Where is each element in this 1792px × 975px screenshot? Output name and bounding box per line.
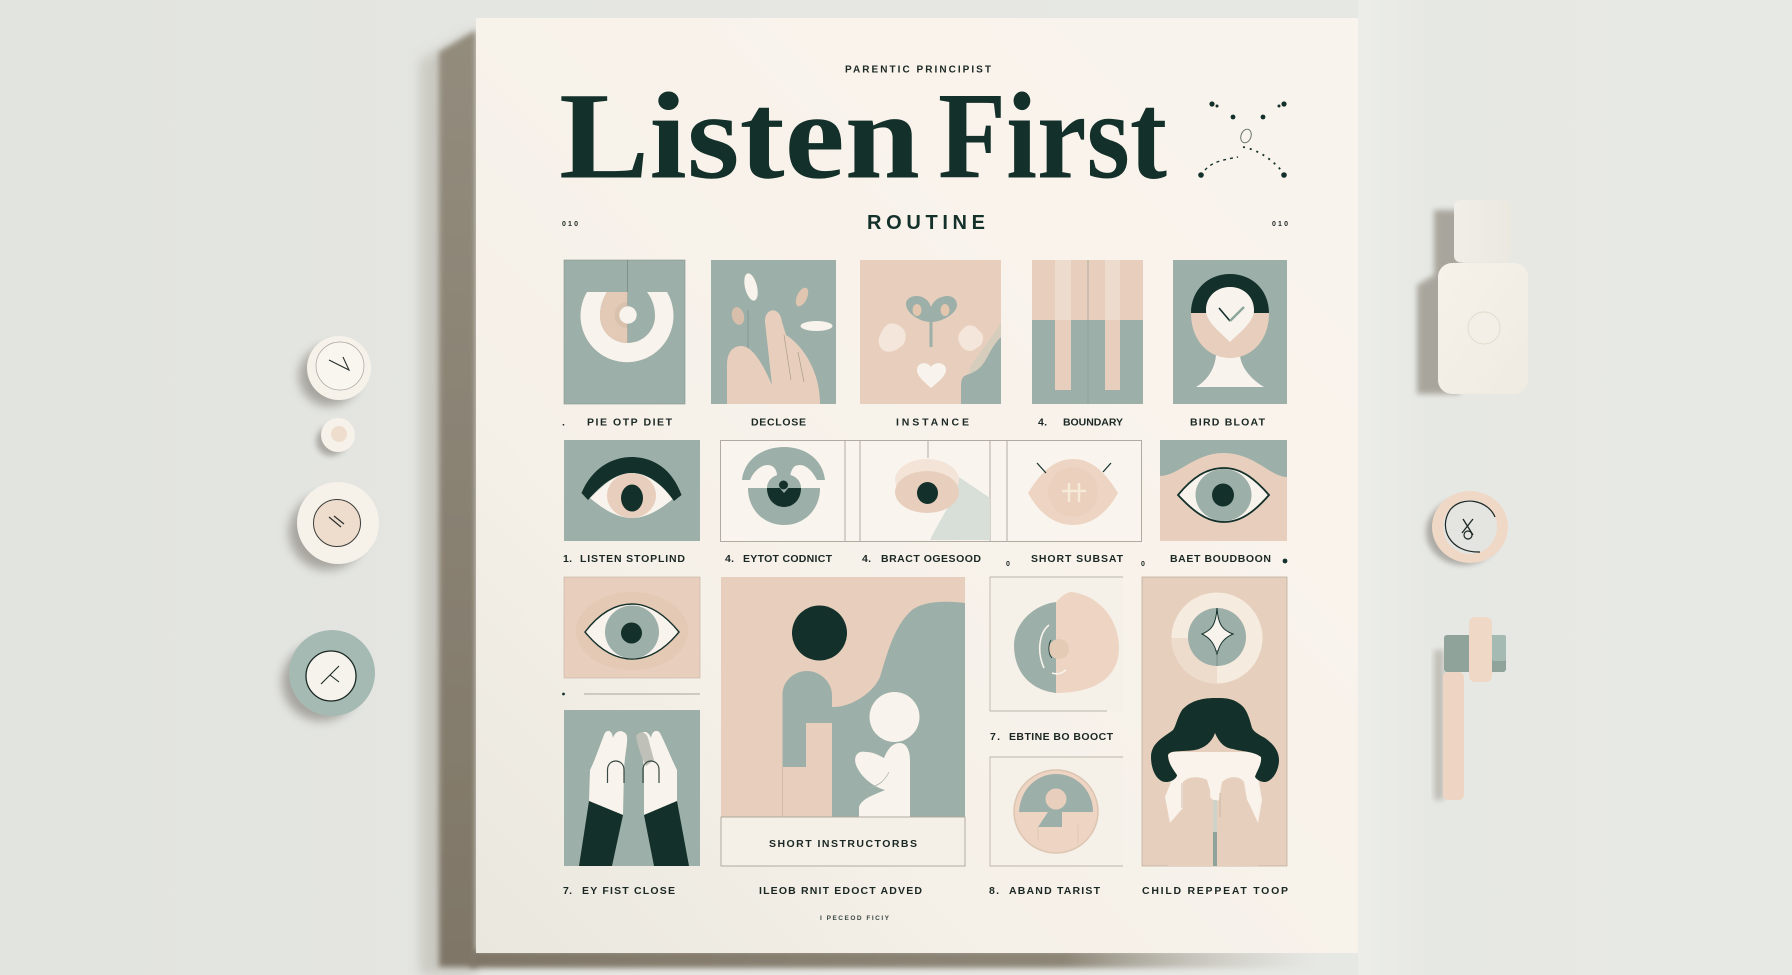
- label: step 8: 8.: [989, 885, 999, 897]
- poster sheet: [476, 18, 1358, 953]
- object: sage button: [282, 630, 375, 721]
- label: bract: 4.: [862, 553, 871, 565]
- object: stick clip: [1434, 617, 1506, 800]
- subtitle: routine: ROUTINE: [867, 212, 985, 234]
- object: peach centred button: [289, 482, 379, 570]
- label: short subsat: SHORT SUBSAT: [1031, 553, 1124, 565]
- child face and hands: [1165, 752, 1263, 866]
- label: instance: INSTANCE: [896, 416, 969, 428]
- footer note: I PECEOD FICIY: [820, 915, 890, 922]
- label: baet: [1141, 553, 1287, 568]
- label: listen: LISTEN STOPLIND: [580, 553, 685, 565]
- label: step 1: .: [562, 416, 565, 428]
- caption box: [721, 817, 965, 866]
- caption box: SHORT INSTRUCTORBS: [769, 838, 917, 850]
- panel: raised hands: [564, 710, 700, 866]
- object: small peach button: [316, 418, 355, 456]
- panel: eye on wave: [1160, 440, 1287, 541]
- panel: arched eye: [564, 440, 700, 541]
- icon: peach eye: [895, 459, 990, 540]
- label: bird bloat: BIRD BLOAT: [1190, 416, 1266, 428]
- label: eye contact: 4.: [725, 553, 734, 565]
- icon: star medallion: [1172, 592, 1262, 684]
- icon: arch and bowl: [742, 447, 825, 525]
- label: step 8: ABAND TARIST: [1009, 885, 1101, 897]
- panel: listen circle: [564, 260, 685, 404]
- label: bract: BRACT OGESOOD: [881, 553, 981, 565]
- label: eye first close: EY FIST CLOSE: [582, 885, 675, 897]
- panel: hand: [711, 260, 836, 404]
- title: [559, 68, 1167, 204]
- panel: parent and child: [721, 577, 965, 866]
- divider with dot: [562, 693, 700, 695]
- panel: stripes: [1032, 260, 1143, 404]
- label: eye contact: EYTOT CODNICT: [743, 553, 833, 565]
- object: peach ring: [1426, 491, 1508, 565]
- label: boundary: 4.: [1038, 416, 1047, 428]
- label: step 7: 7.: [990, 731, 1000, 743]
- eyebrow text: PARENTIC PRINCIPIST: [845, 64, 991, 76]
- child hair: [1151, 698, 1279, 782]
- object: bottle: [1417, 200, 1528, 394]
- label: step 7: EBTINE BO BOOCT: [1009, 731, 1114, 743]
- label: child repeat: CHILD REPPEAT TOOP: [1142, 885, 1288, 897]
- label: short subsat: 0: [1006, 561, 1010, 568]
- label: eye first close: 7.: [563, 885, 572, 897]
- panel: heart sprout: [860, 260, 1001, 404]
- label: declose: DECLOSE: [751, 416, 806, 428]
- title: Listen: [559, 68, 920, 204]
- label: baet: BAET BOUDBOON: [1170, 553, 1271, 565]
- panel: child covering face: [1142, 577, 1287, 866]
- icon: peach blob with ticks: [1028, 459, 1118, 525]
- panel: keyhole circle: [990, 757, 1123, 866]
- label: center: ILEOB RNIT EDOCT ADVED: [759, 885, 922, 897]
- label: boundary: BOUNDARY: [1063, 416, 1123, 428]
- object: white button with line: [299, 336, 371, 406]
- panel: peach eye: [564, 577, 700, 678]
- small right mark: 010: [1272, 221, 1288, 228]
- label: listen: 1.: [563, 553, 572, 565]
- label: short subsat: [1006, 553, 1124, 568]
- title: First: [938, 68, 1167, 204]
- panel: half circle: [990, 577, 1123, 711]
- small left mark: 010: [562, 221, 578, 228]
- paper shadow: [420, 0, 1428, 975]
- panel: triple frame: [720, 440, 1142, 542]
- label: baet: 0: [1141, 561, 1145, 568]
- label: step 1: PIE OTP DIET: [587, 416, 673, 428]
- panel: head with check: [1173, 260, 1287, 404]
- icon: dotted flourish beside title: [1198, 101, 1287, 178]
